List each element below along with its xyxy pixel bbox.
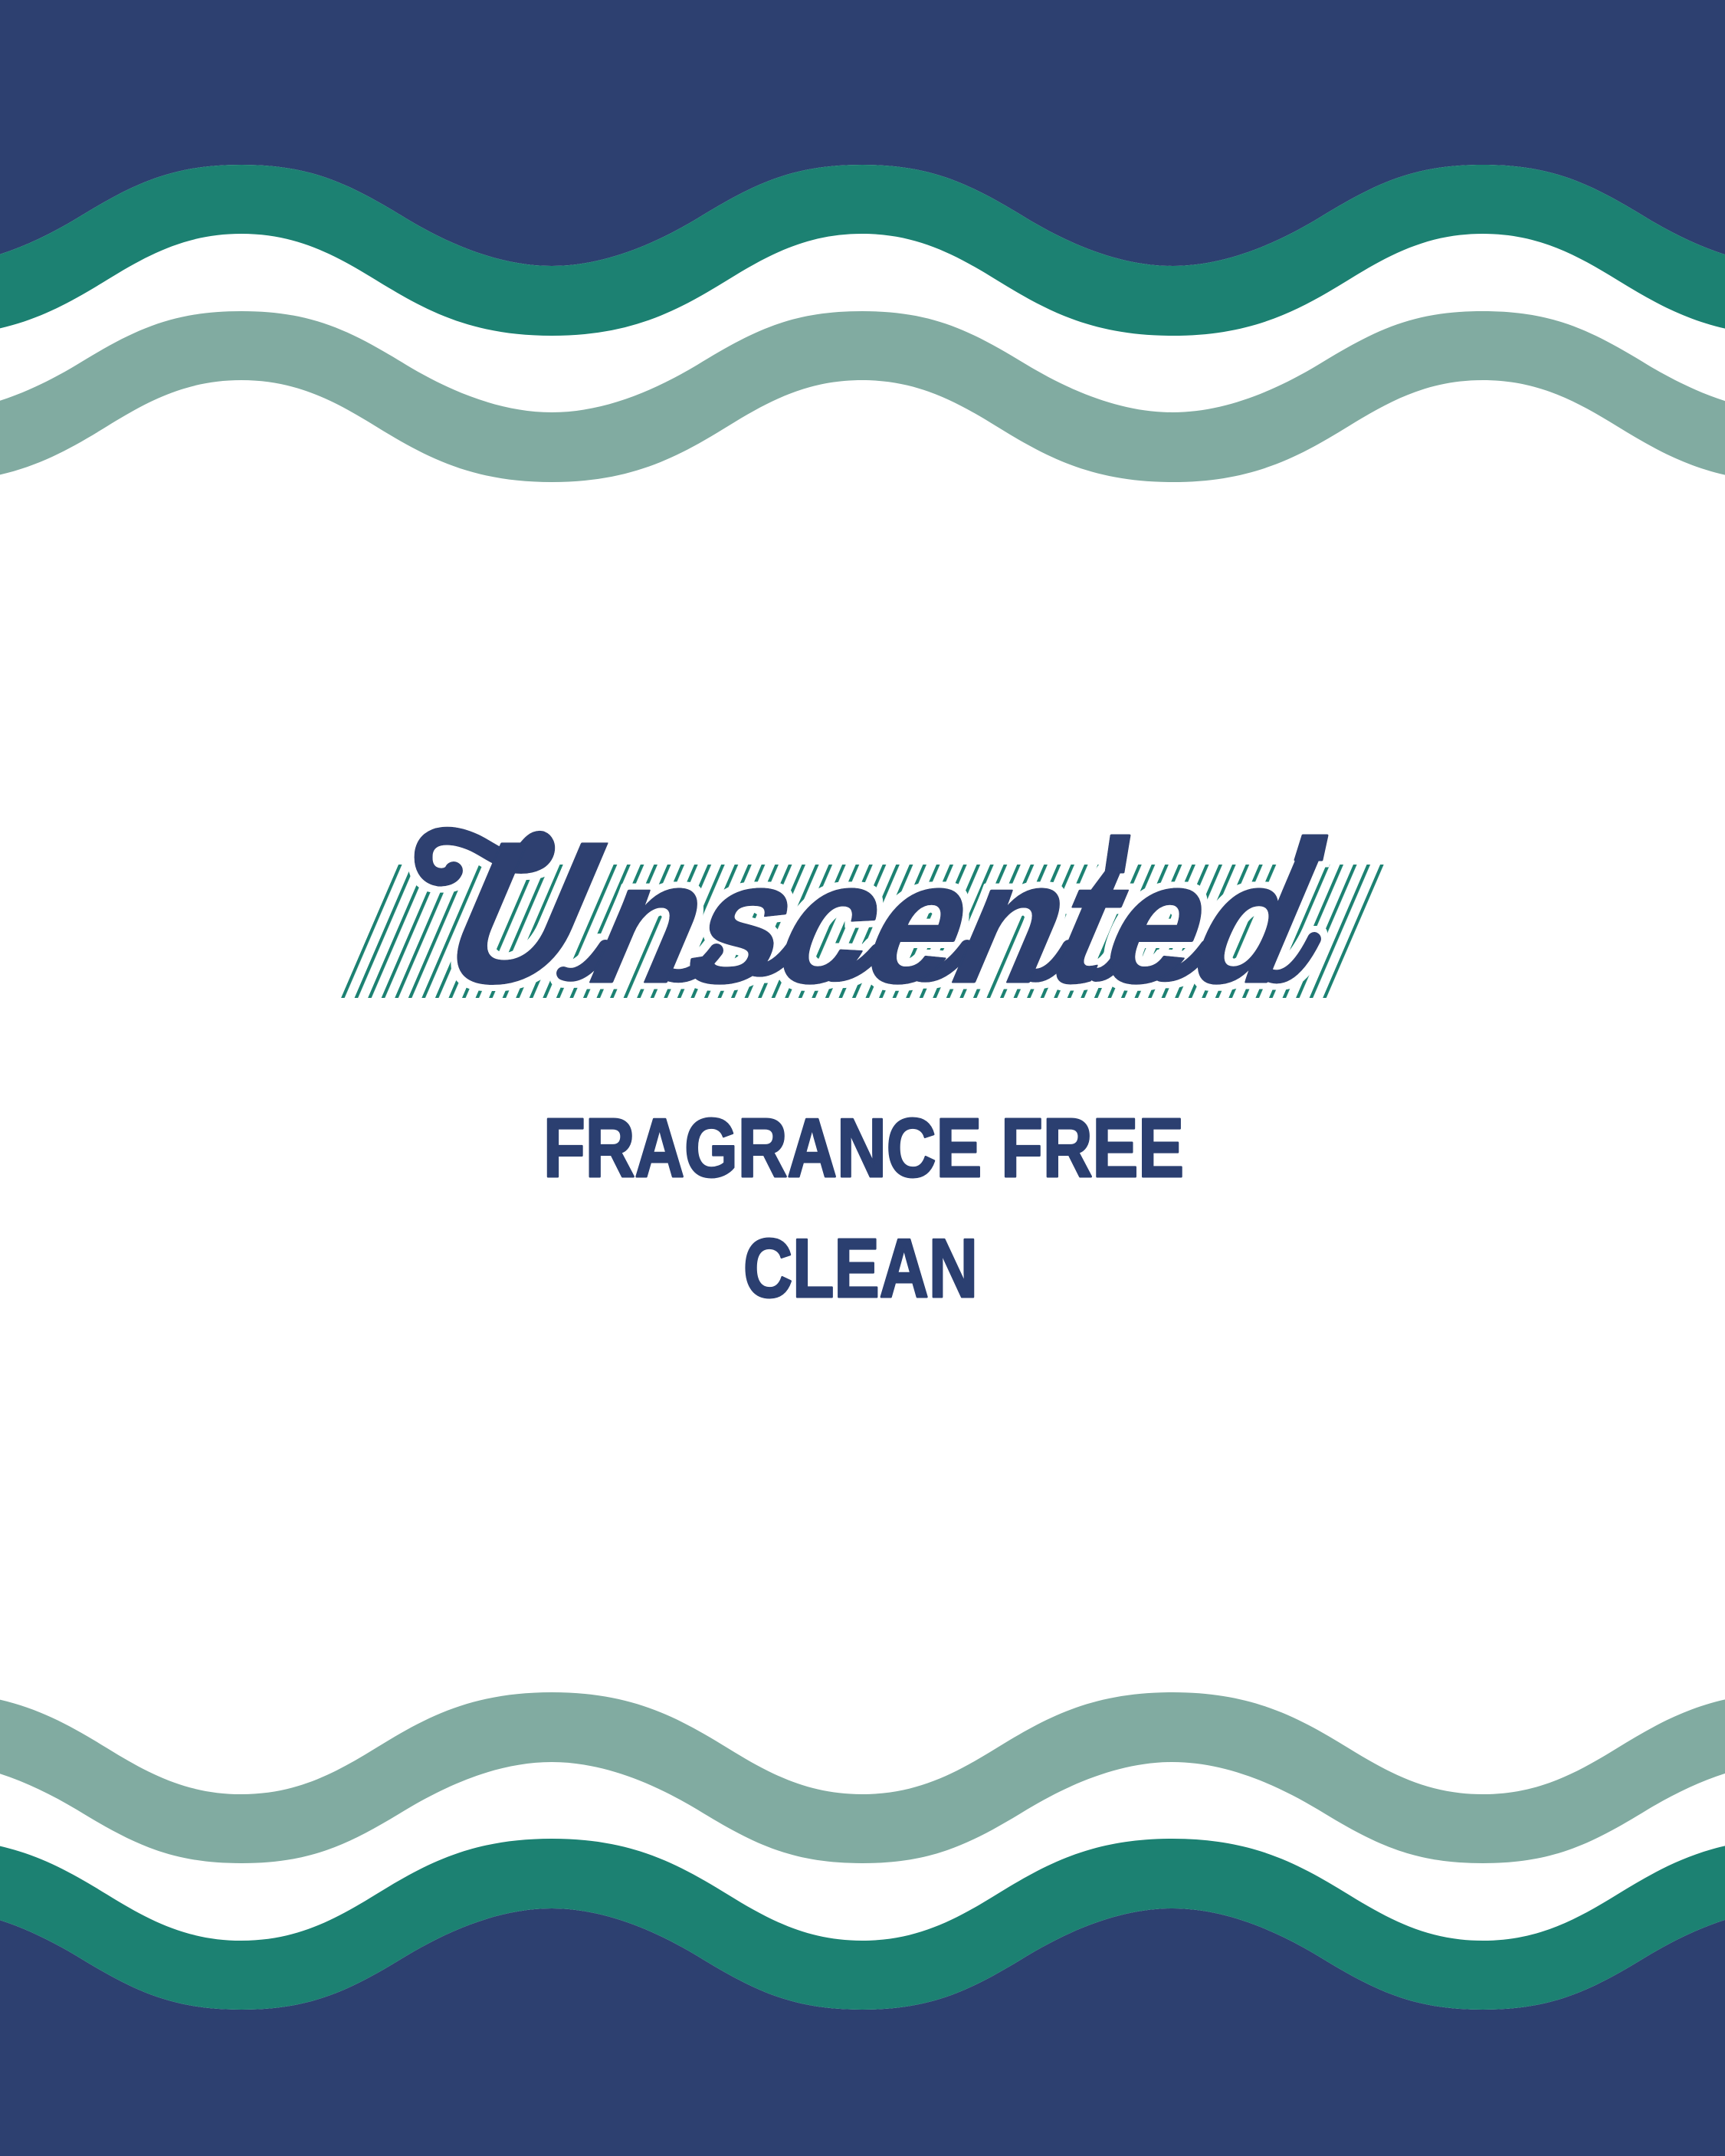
- script title word: [414, 800, 1344, 1025]
- hatched parallelogram: [341, 865, 1384, 998]
- title text: remaining letters: nscented: [564, 825, 1344, 1019]
- top navy band: [0, 0, 1725, 266]
- bottom green wave: [0, 1839, 1725, 2010]
- script joins and tail between letters: [563, 939, 1314, 976]
- tagline: CLEAN: CLEAN: [743, 1222, 978, 1315]
- top mint wave: [0, 311, 1725, 482]
- bottom waves: [0, 1692, 1725, 2156]
- title text: capital U: U: [414, 800, 636, 1025]
- bottom mint wave: [0, 1692, 1725, 1863]
- swash flourish on the capital: [424, 836, 546, 878]
- top green wave: [0, 165, 1725, 336]
- bottom navy band: [0, 1908, 1725, 2156]
- logo: Unscented over hatching: [341, 800, 1384, 1025]
- tall ascender strokes: [1106, 835, 1327, 872]
- top waves: [0, 0, 1725, 482]
- tagline: FRAGRANCE FREE: FRAGRANCE FREE: [543, 1101, 1184, 1195]
